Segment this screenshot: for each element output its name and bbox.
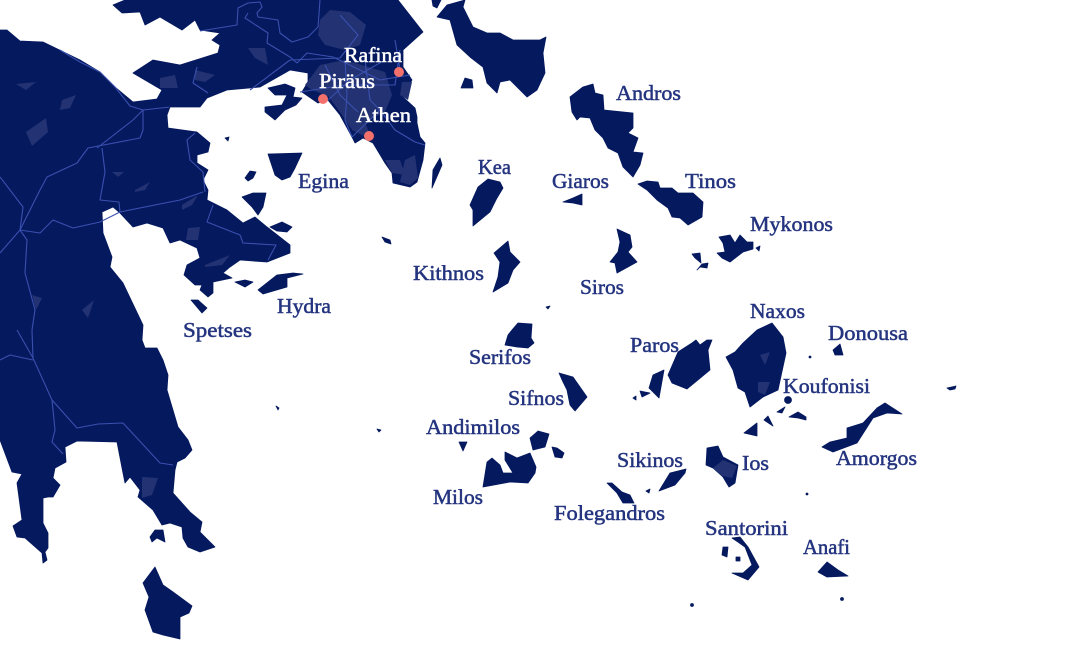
label: Andimilos: Andimilos xyxy=(426,415,520,439)
label: Amorgos: Amorgos xyxy=(836,446,917,470)
label: Koufonisi: Koufonisi xyxy=(783,374,870,398)
label: Folegandros: Folegandros xyxy=(554,501,665,525)
label: Kithnos: Kithnos xyxy=(413,261,484,285)
islands: Western Cyclades xyxy=(276,306,686,503)
islands: Kythira and Elafonisos xyxy=(143,530,192,639)
label: Rafina: Rafina xyxy=(344,43,403,67)
label: Donousa: Donousa xyxy=(828,321,909,345)
landmass: central Greece and Attica xyxy=(113,0,425,187)
label: Serifos: Serifos xyxy=(469,345,531,369)
label: Paros: Paros xyxy=(630,333,679,357)
islands: Northern Cyclades xyxy=(382,84,760,292)
label: Milos: Milos xyxy=(433,485,483,509)
label: Ios: Ios xyxy=(742,451,769,475)
label: Athen: Athen xyxy=(356,103,412,127)
landmass: Peloponnese xyxy=(0,30,290,563)
place labels xyxy=(183,43,917,559)
marker: Piräus xyxy=(318,94,328,104)
label: Sifnos: Sifnos xyxy=(508,386,564,410)
label: Egina: Egina xyxy=(298,169,350,193)
label: Hydra: Hydra xyxy=(277,294,332,318)
label: Sikinos: Sikinos xyxy=(617,448,683,472)
label: Kea: Kea xyxy=(478,155,512,179)
label: Andros: Andros xyxy=(616,81,681,105)
label: Santorini: Santorini xyxy=(705,516,788,540)
label: Siros: Siros xyxy=(580,275,624,299)
city markers xyxy=(318,67,404,141)
marker: Rafina xyxy=(394,67,404,77)
label: Spetses: Spetses xyxy=(183,318,252,342)
label: Mykonos: Mykonos xyxy=(750,212,833,236)
label: Anafi: Anafi xyxy=(803,535,850,559)
island: Evia xyxy=(432,0,546,97)
label: Piräus: Piräus xyxy=(319,69,375,93)
label: Naxos: Naxos xyxy=(750,299,805,323)
islands: Saronic Gulf xyxy=(191,84,303,313)
label: Giaros: Giaros xyxy=(552,169,609,193)
marker: Athen xyxy=(364,131,374,141)
label: Tinos: Tinos xyxy=(685,169,736,193)
islands: Central and Eastern Cyclades xyxy=(633,323,956,606)
